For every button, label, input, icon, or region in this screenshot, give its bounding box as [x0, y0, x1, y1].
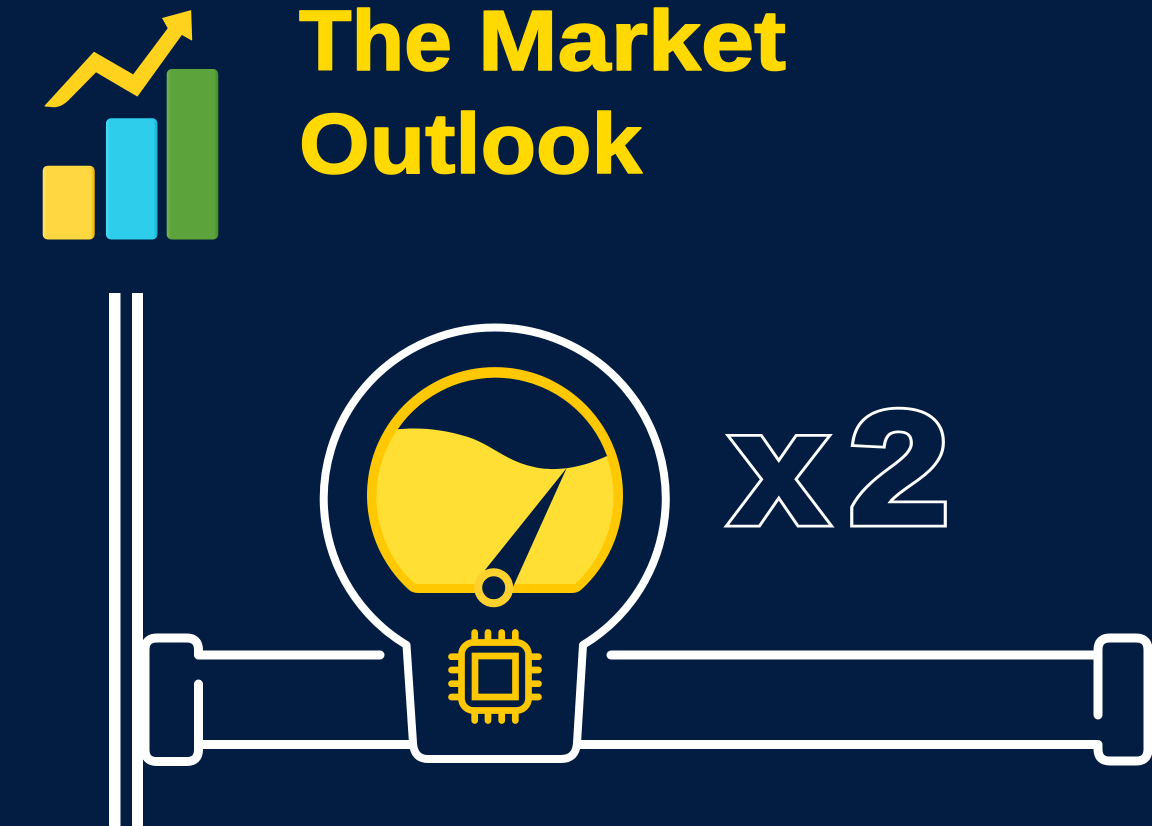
right pipe with flange — [580, 638, 1148, 761]
x2 outline: x — [732, 378, 826, 557]
green bar — [167, 69, 218, 240]
left pipe bottom line — [198, 740, 412, 749]
multiplier label x2 — [732, 378, 949, 557]
title: Outlook — [299, 97, 643, 192]
gauge rim — [367, 367, 623, 593]
x2 inner: x — [732, 378, 826, 557]
x2 inner — [732, 378, 949, 557]
needle hub — [478, 572, 509, 603]
x2 inner: 2 — [849, 378, 949, 557]
gauge dial — [367, 367, 623, 603]
title — [299, 0, 786, 192]
icon: microchip — [452, 632, 538, 720]
blue bar — [106, 118, 158, 240]
x2 outline: 2 — [849, 378, 949, 557]
icon arrow — [45, 11, 192, 107]
gauge fill — [376, 378, 613, 584]
x2 outline — [732, 378, 949, 557]
bulb shaped gauge housing — [324, 328, 666, 759]
vertical double pipe — [109, 293, 143, 826]
left pipe top line — [198, 650, 380, 660]
gauge empty area with wave — [398, 378, 607, 469]
yellow bar — [43, 166, 95, 240]
icon: rising bar chart with arrow — [43, 11, 218, 240]
gauge needle — [485, 468, 567, 587]
left pipe flange — [145, 638, 412, 762]
